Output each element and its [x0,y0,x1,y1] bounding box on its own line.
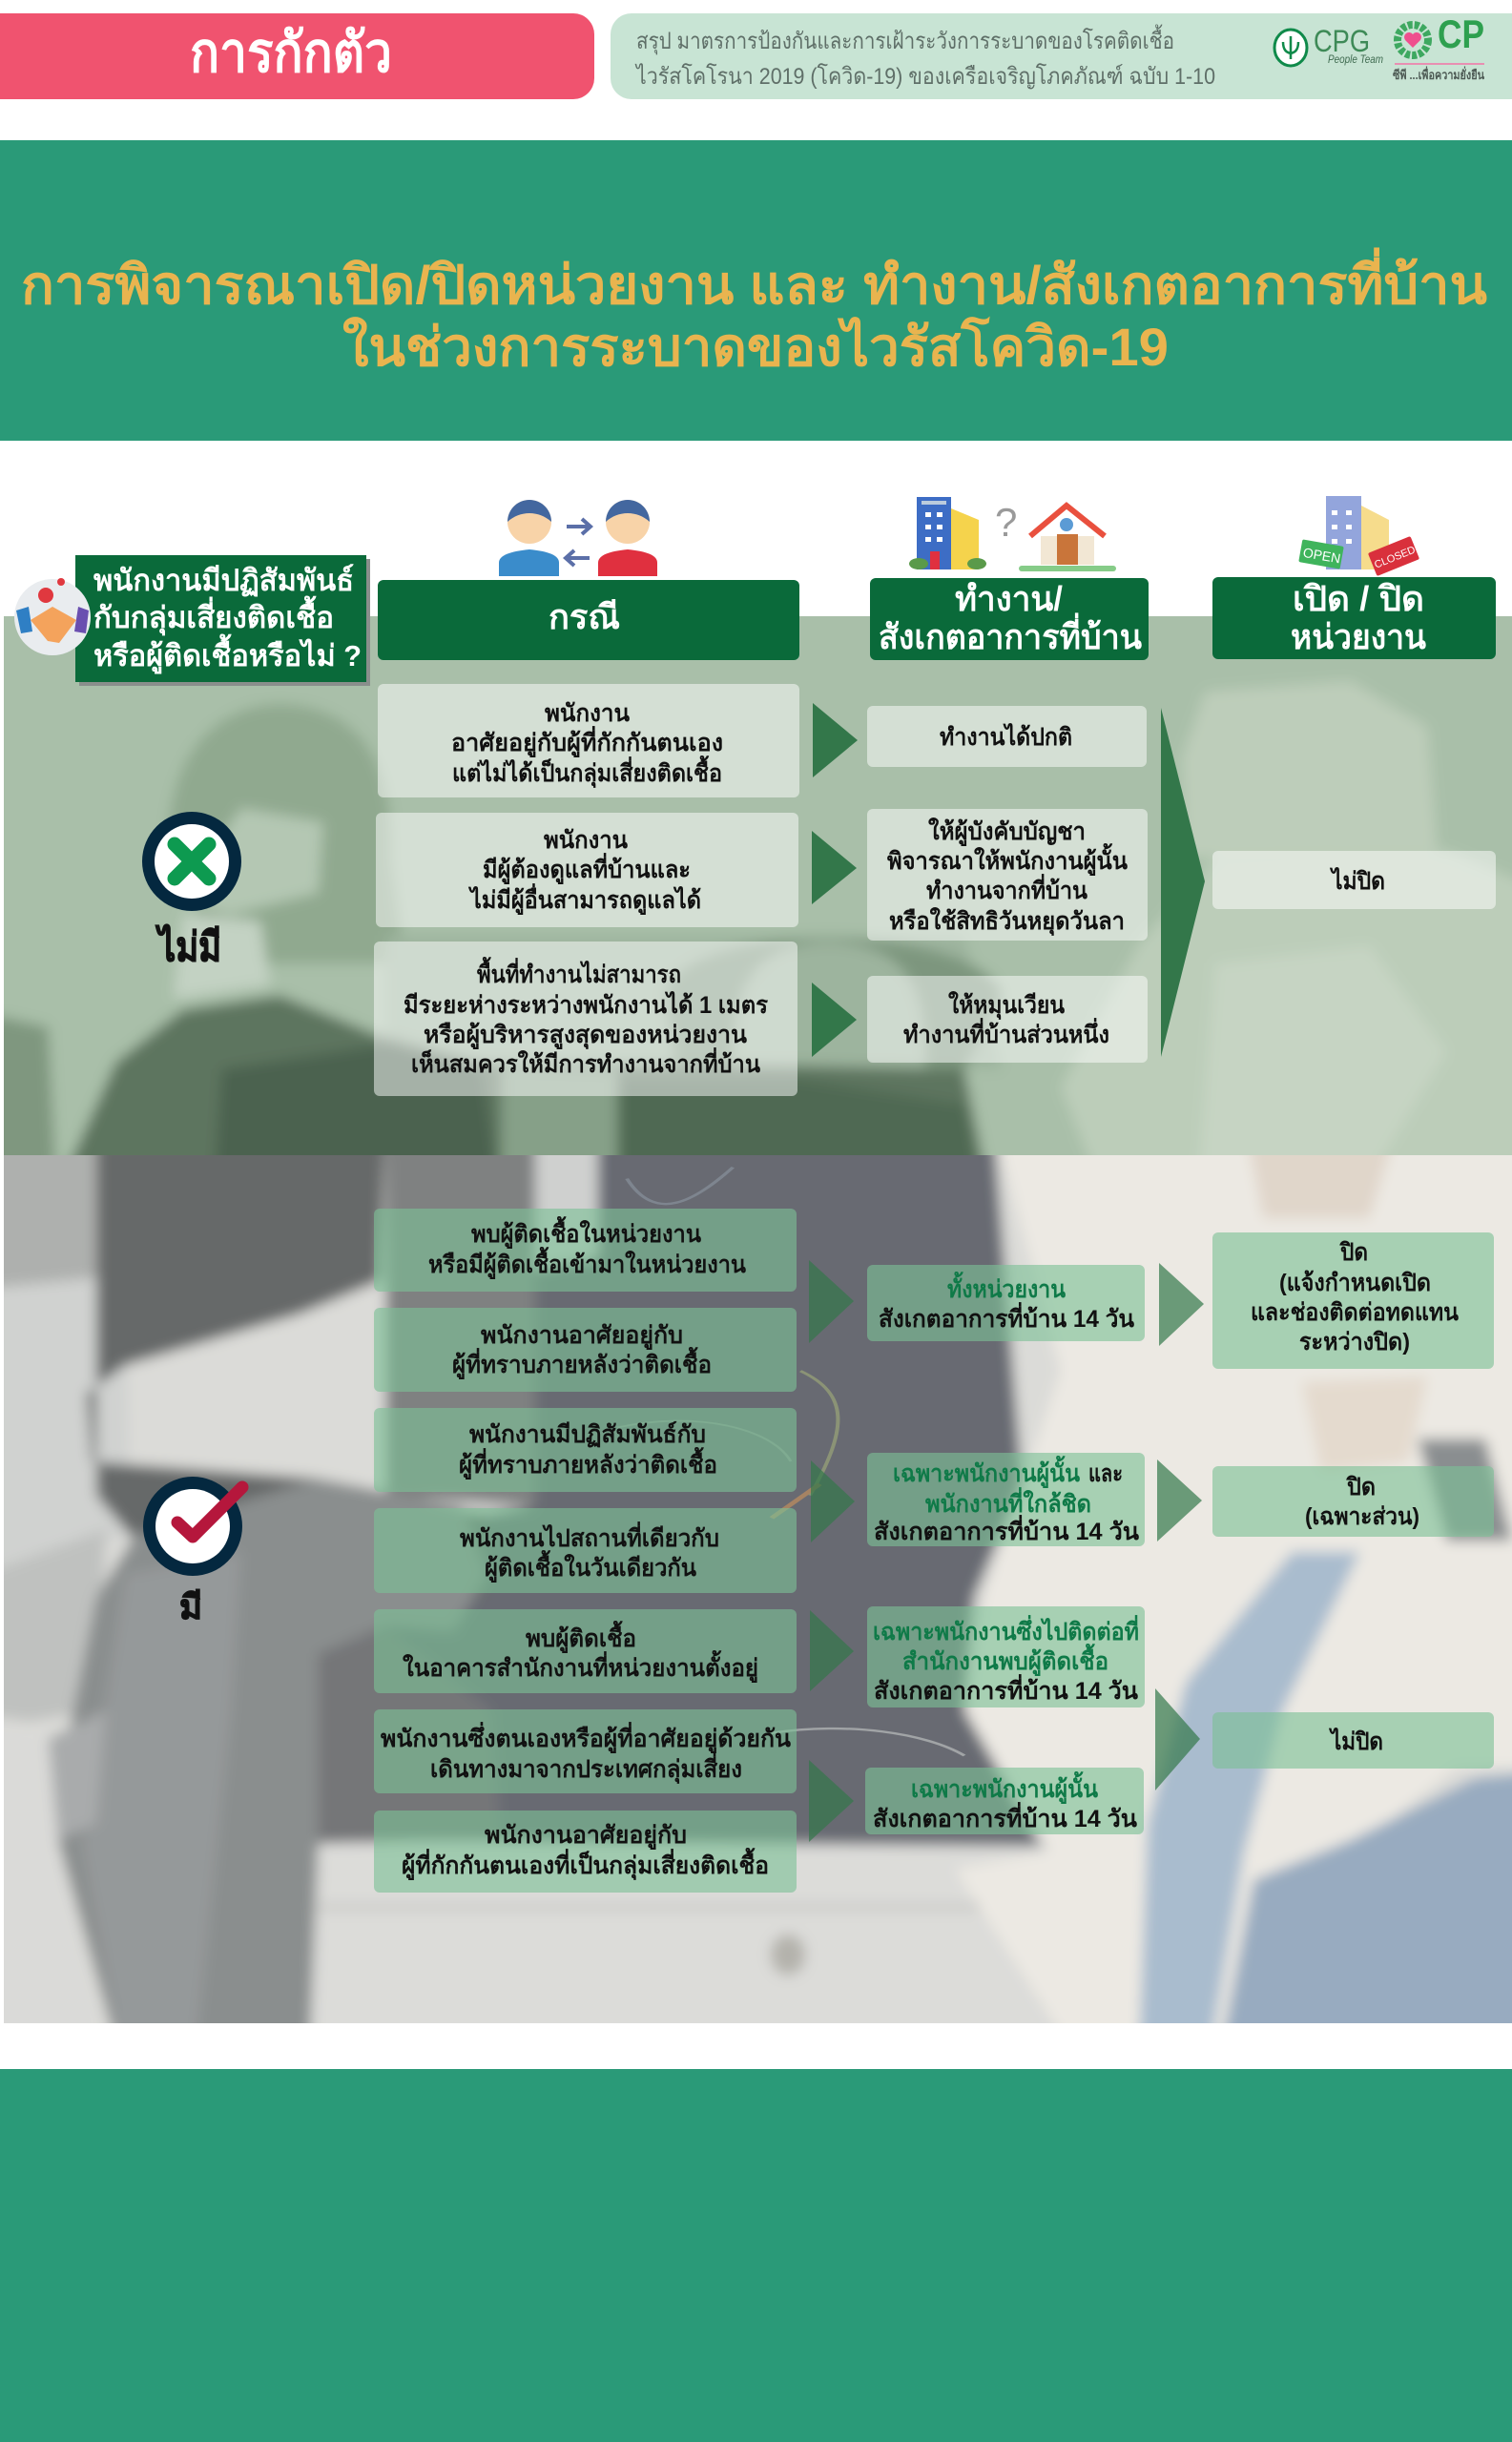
case box 3: พื้นที่ทำงานไม่สามารถ [477,956,681,988]
result box: supervisor considers: หรือใช้สิทธิวันหยุดวันลา [889,906,1125,937]
question box: กับกลุ่มเสี่ยงติดเชื้อ [93,595,334,636]
case box: contact with later infected: ผู้ที่ทราบภายหลังว่าติดเชื้อ [459,1446,717,1480]
case box: travel from risk country [374,1709,797,1793]
case box: contact with later infected [374,1408,797,1492]
logo: CPG People Team: People Team [1328,52,1383,66]
result box: whole unit: ทั้งหน่วยงาน [947,1271,1066,1303]
section tab: quarantine title [0,13,594,99]
footer band [0,2069,1512,2442]
case box: contact with later infected: พนักงานมีปฏิสัมพันธ์กับ [469,1420,706,1448]
header: open or close unit: หน่วยงาน [1291,617,1426,656]
header: open or close unit: เปิด / ปิด [1293,579,1424,618]
outcome box: closed with notice: ระหว่างปิด) [1299,1329,1410,1356]
arrow [810,1610,854,1691]
arrow [813,703,858,777]
case box 3: เห็นสมควรให้มีการทำงานจากที่บ้าน [411,1047,760,1078]
case box 3: มีระยะห่างระหว่างพนักงานได้ 1 เมตร [404,990,769,1019]
result box: employee only [865,1768,1144,1834]
question box: พนักงานมีปฏิสัมพันธ์ [93,564,354,597]
title banner: ในช่วงการระบาดของไวรัสโควิด-19 [342,316,1169,377]
case box 2: พนักงาน [544,827,628,854]
case box: lives with later infected: ผู้ที่ทราบภายหลังว่าติดเชื้อ [452,1346,712,1380]
result box: whole unit [867,1265,1145,1341]
case box 1: อาศัยอยู่กับผู้ที่กักกันตนเอง [451,726,723,758]
case box: lives with quarantined risk person [374,1811,797,1893]
logo: CPG People Team: CPG [1314,24,1370,58]
result box: employee who visited: สังเกตอาการที่บ้าน 14 วัน [874,1674,1138,1705]
case box 2 [376,813,798,927]
arrow [809,1260,854,1343]
header: case [378,580,799,660]
result box: employee and close contacts: เฉพาะพนักงานผู้นั้น [893,1455,1080,1489]
summary text: สรุป มาตรการป้องกันและการเฝ้าระวังการระบาดของโรคติดเชื้อ [636,24,1174,55]
result box: employee who visited [867,1606,1145,1707]
result box: employee only: เฉพาะพนักงานผู้นั้น [911,1770,1098,1805]
icon: building with open and closed signs: OPEN [1302,545,1342,566]
panel: no contact [14,496,1496,1096]
result box: do not close [1212,851,1496,909]
arrow [1159,1263,1204,1346]
case box: same place [374,1508,797,1593]
header: work or monitor at home: สังเกตอาการที่บ้าน [879,612,1142,656]
title banner: การพิจารณาเปิด/ปิดหน่วยงาน และ ทำงาน/สังเกตอาการที่บ้าน [21,247,1487,315]
logo: CP sustainability: ซีพี ...เพื่อความยั่งยืน [1393,66,1484,82]
result box: normal work [867,706,1147,767]
result box: employee and close contacts [867,1453,1145,1546]
case box: same building: ในอาคารสำนักงานที่หน่วยงานตั้งอยู่ [403,1649,758,1684]
outcome box: partially closed: (เฉพาะส่วน) [1305,1503,1419,1530]
result box: rotate: ทำงานที่บ้านส่วนหนึ่ง [903,1018,1109,1048]
label: yes: มี [179,1587,202,1626]
result box: employee who visited: สำนักงานพบผู้ติดเชื้อ [902,1643,1108,1677]
result box: rotate [867,976,1148,1063]
arrow [1157,1459,1202,1542]
result box: supervisor considers: ทำงานจากที่บ้าน [926,874,1087,904]
arrow [811,1460,855,1542]
arrow [812,983,857,1057]
result box: employee and close contacts: สังเกตอาการที่บ้าน 14 วัน [874,1515,1139,1545]
header: case: กรณี [549,597,620,636]
upper photo with green tint [4,616,1512,1155]
case box: same building [374,1609,797,1693]
icon: building with open and closed signs [1298,496,1419,576]
case box: travel from risk country: เดินทางมาจากประเทศกลุ่มเสี่ยง [430,1752,742,1785]
panel: has contact [143,1209,1494,1893]
case box: infected in unit [374,1209,797,1292]
case box 2: มีผู้ต้องดูแลที่บ้านและ [483,853,691,885]
label: no: ไม่มี [155,923,221,969]
summary text: ไวรัสโคโรนา 2019 (โควิด-19) ของเครือเจริญโภคภัณฑ์ ฉบับ 1-10 [634,63,1215,90]
icon: office, question mark and house: ? [995,500,1017,545]
case box 2: ไม่มีผู้อื่นสามารถดูแลได้ [467,883,701,916]
logo: CPG People Team [1274,24,1383,66]
case box: same place: พนักงานไปสถานที่เดียวกับ [460,1521,719,1552]
case box: lives with quarantined risk person: พนักงานอาศัยอยู่กับ [485,1822,687,1851]
summary text [634,24,1215,90]
arrow [1155,1688,1200,1790]
outcome box: not closed [1212,1712,1494,1769]
background photo: two commuters on a train [0,596,1512,2083]
arrow [809,1760,854,1842]
outcome box: closed with notice: ปิด [1339,1239,1368,1266]
result box: employee and close contacts: และ [1088,1460,1123,1487]
result box: normal work: ทำงานได้ปกติ [940,722,1072,751]
header: open or close unit [1212,577,1496,659]
result box: supervisor considers [867,809,1148,941]
case box 1: แต่ไม่ได้เป็นกลุ่มเสี่ยงติดเชื้อ [452,755,722,789]
title banner [0,140,1512,441]
icon: check, yes [143,1477,242,1576]
result box: employee and close contacts: พนักงานที่ใกล้ชิด [925,1487,1091,1518]
section tab: quarantine title: การกักตัว [190,22,392,84]
case box 3 [374,942,797,1096]
outcome box: partially closed: ปิด [1346,1474,1376,1500]
big arrow [1161,708,1205,1057]
result box: employee who visited: เฉพาะพนักงานซึ่งไปติดต่อที่ [873,1615,1139,1645]
icon: handshake with virus [14,578,91,655]
case box: travel from risk country: พนักงานซึ่งตนเองหรือผู้ที่อาศัยอยู่ด้วยกัน [381,1722,791,1754]
outcome box: closed with notice: และช่องติดต่อทดแทน [1251,1299,1459,1326]
icon: building with open and closed signs: CLOSED [1373,545,1418,571]
outcome box: closed with notice: (แจ้งกำหนดเปิด [1279,1270,1431,1296]
header: work or monitor at home [870,578,1149,660]
case box: infected in unit: หรือมีผู้ติดเชื้อเข้ามาในหน่วยงาน [428,1246,746,1280]
lower photo with pale tint [0,1122,1512,2083]
outcome box: partially closed [1212,1466,1494,1537]
header: work or monitor at home: ทำงาน/ [955,579,1063,618]
case box: infected in unit: พบผู้ติดเชื้อในหน่วยงาน [471,1215,701,1250]
case box: same building: พบผู้ติดเชื้อ [526,1620,636,1654]
icon: two people exchanging [499,500,657,576]
outcome box: not closed: ไม่ปิด [1328,1727,1383,1755]
result box: supervisor considers: ให้ผู้บังคับบัญชา [928,817,1086,847]
case box 1 [378,684,799,797]
case box: lives with quarantined risk person: ผู้ที่กักกันตนเองที่เป็นกลุ่มเสี่ยงติดเชื้อ [402,1847,769,1881]
arrow [812,831,857,904]
logo: CP sustainability: CP [1438,11,1484,56]
question box: หรือผู้ติดเชื้อหรือไม่ ? [93,633,362,674]
result box: whole unit: สังเกตอาการที่บ้าน 14 วัน [879,1302,1134,1333]
case box: same place: ผู้ติดเชื้อในวันเดียวกัน [485,1549,696,1583]
result box: do not close: ไม่ปิด [1329,866,1385,895]
question box [75,555,370,686]
case box 3: หรือผู้บริหารสูงสุดของหน่วยงาน [424,1022,747,1050]
result box: rotate: ให้หมุนเวียน [948,990,1065,1021]
icon: office, question mark and house [909,497,1116,571]
case box: lives with later infected [374,1308,797,1392]
result box: supervisor considers: พิจารณาให้พนักงานผู้นั้น [887,842,1128,877]
outcome box: closed with notice [1212,1232,1494,1369]
case box 1: พนักงาน [545,700,630,727]
logo: CP sustainability [1393,11,1484,82]
icon: cross, no [142,812,241,911]
case box: lives with later infected: พนักงานอาศัยอยู่กับ [481,1322,683,1351]
header strip: summary text and logos [611,11,1512,99]
result box: employee only: สังเกตอาการที่บ้าน 14 วัน [873,1802,1137,1832]
